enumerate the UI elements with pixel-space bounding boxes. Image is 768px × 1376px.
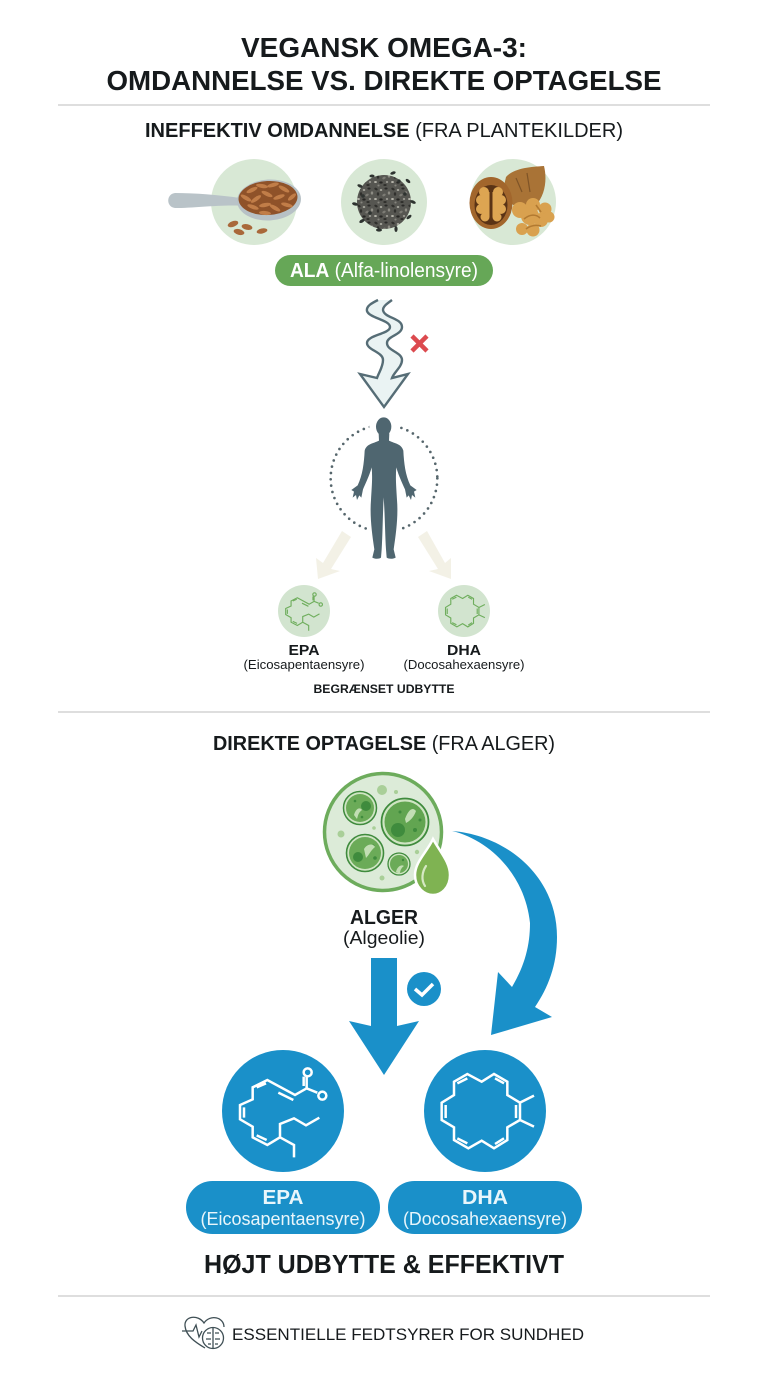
arrow: curved blue arrow bbox=[452, 831, 557, 1035]
footer bbox=[182, 1317, 584, 1349]
label: small DHA: DHA bbox=[447, 642, 481, 659]
label: small EPA bbox=[244, 642, 364, 672]
label: EPA pill: (Eicosapentaensyre) bbox=[200, 1209, 366, 1229]
label: EPA pill: EPA bbox=[262, 1187, 304, 1209]
label: DHA pill: (Docosahexaensyre) bbox=[403, 1209, 567, 1229]
label: algae: (Algeolie) bbox=[343, 928, 425, 948]
icon: large EPA molecule bbox=[222, 1050, 344, 1172]
icon: check badge bbox=[407, 972, 441, 1006]
title bbox=[106, 32, 662, 96]
label: EPA pill bbox=[186, 1181, 380, 1234]
label: limited yield: BEGRÆNSET UDBYTTE bbox=[314, 684, 455, 696]
icon: heart and brain bbox=[182, 1317, 224, 1349]
label: small EPA: (Eicosapentaensyre) bbox=[244, 658, 364, 672]
footer text: ESSENTIELLE FEDTSYRER FOR SUNDHED bbox=[232, 1325, 584, 1344]
icon: algae cell with oil drop bbox=[324, 774, 450, 895]
icon: small EPA molecule bbox=[278, 585, 330, 637]
icon: human body bbox=[331, 417, 437, 559]
label: small DHA bbox=[404, 642, 524, 672]
arrow: pale arrow to EPA bbox=[316, 531, 351, 579]
panel: direct absorption bbox=[186, 733, 582, 1279]
arrow: straight blue arrow bbox=[349, 958, 419, 1075]
label: small DHA: (Docosahexaensyre) bbox=[404, 658, 524, 672]
icon: flaxseed spoon bbox=[168, 159, 302, 245]
icon: large DHA molecule bbox=[424, 1050, 546, 1172]
label: algae bbox=[343, 907, 425, 948]
icon: red cross bbox=[412, 336, 427, 351]
label: ALA pill: ALA (Alfa-linolensyre) bbox=[290, 260, 478, 282]
label: high yield: HØJT UDBYTTE & EFFEKTIVT bbox=[204, 1249, 564, 1279]
icon: small DHA molecule bbox=[438, 585, 490, 637]
label: small EPA: EPA bbox=[288, 642, 320, 659]
label: DHA pill: DHA bbox=[462, 1187, 508, 1209]
arrow: inefficient squiggle bbox=[360, 300, 408, 407]
label: DHA pill bbox=[388, 1181, 582, 1234]
label: algae: ALGER bbox=[350, 907, 419, 929]
icon: walnuts bbox=[470, 159, 556, 245]
label: ALA pill bbox=[275, 255, 493, 286]
icon: chia seeds bbox=[341, 159, 427, 245]
arrow: pale arrow to DHA bbox=[418, 531, 451, 579]
title: VEGANSK OMEGA-3: bbox=[241, 32, 527, 63]
heading: direct absorption: DIREKTE OPTAGELSE (FRA ALGER) bbox=[213, 733, 555, 755]
panel: ineffective conversion bbox=[145, 120, 623, 696]
heading: ineffective conversion: INEFFEKTIV OMDANNELSE (FRA PLANTEKILDER) bbox=[145, 120, 623, 142]
title: OMDANNELSE VS. DIREKTE OPTAGELSE bbox=[106, 65, 662, 96]
